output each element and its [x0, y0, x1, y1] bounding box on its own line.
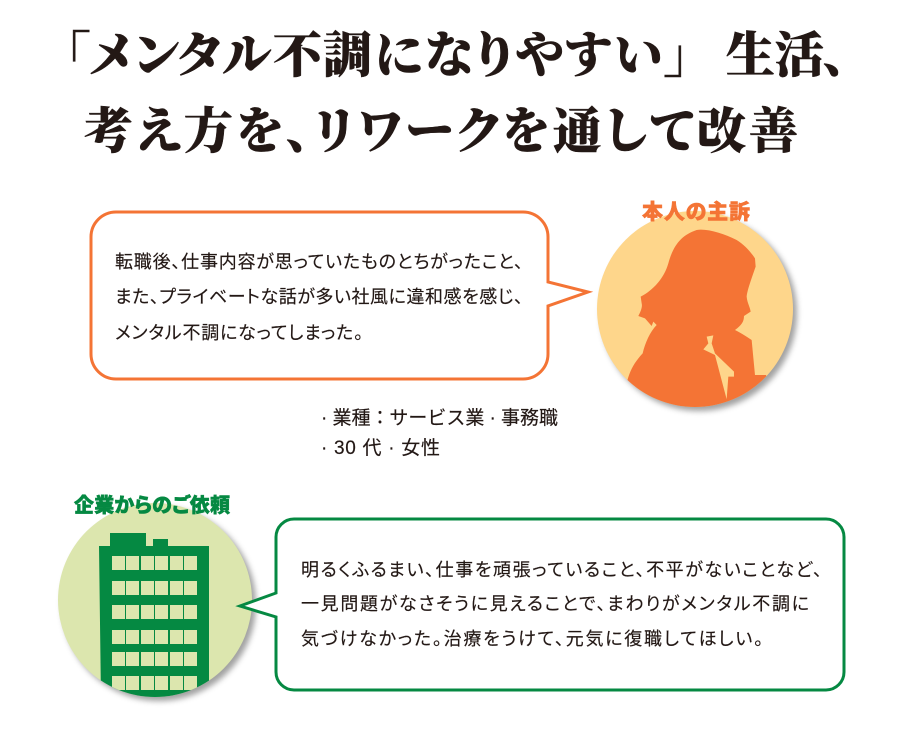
- complaint text: メンタル不調になってしまった。: [115, 323, 363, 343]
- heading: company request label: 企業からのご依頼: [74, 493, 230, 517]
- patient attributes text: · 30 代 · 女性: [321, 437, 440, 459]
- complaint text: 転職後、仕事内容が思っていたものとちがったこと、: [115, 252, 523, 272]
- request text: 気づけなかった。治療をうけて、元気に復職してほしい。: [301, 629, 763, 649]
- icon: patient silhouette circle: [597, 211, 797, 417]
- request text: 明るくふるまい、仕事を頑張っていること、不平がないことなど、: [301, 560, 822, 580]
- icon: company building circle: [58, 503, 256, 701]
- title: [66, 28, 848, 159]
- title: 「メンタル不調になりやすい」: [66, 28, 688, 83]
- title: 考え方を、リワークを通して改善: [84, 104, 798, 159]
- patient attributes text: [321, 407, 558, 459]
- heading: patient complaint label: 本人の主訴: [642, 200, 750, 224]
- request text: [301, 560, 822, 649]
- patient attributes text: · 業種：サービス業 · 事務職: [321, 407, 558, 429]
- title: 生活、: [726, 28, 848, 83]
- panel: company request speech bubble: [240, 519, 844, 690]
- request text: 一見問題がなさそうに見えることで、まわりがメンタル不調に: [301, 594, 809, 614]
- panel: patient complaint speech bubble: [91, 212, 588, 379]
- complaint text: [115, 252, 523, 343]
- complaint text: また、プライベートな話が多い社風に違和感を感じ、: [115, 287, 523, 307]
